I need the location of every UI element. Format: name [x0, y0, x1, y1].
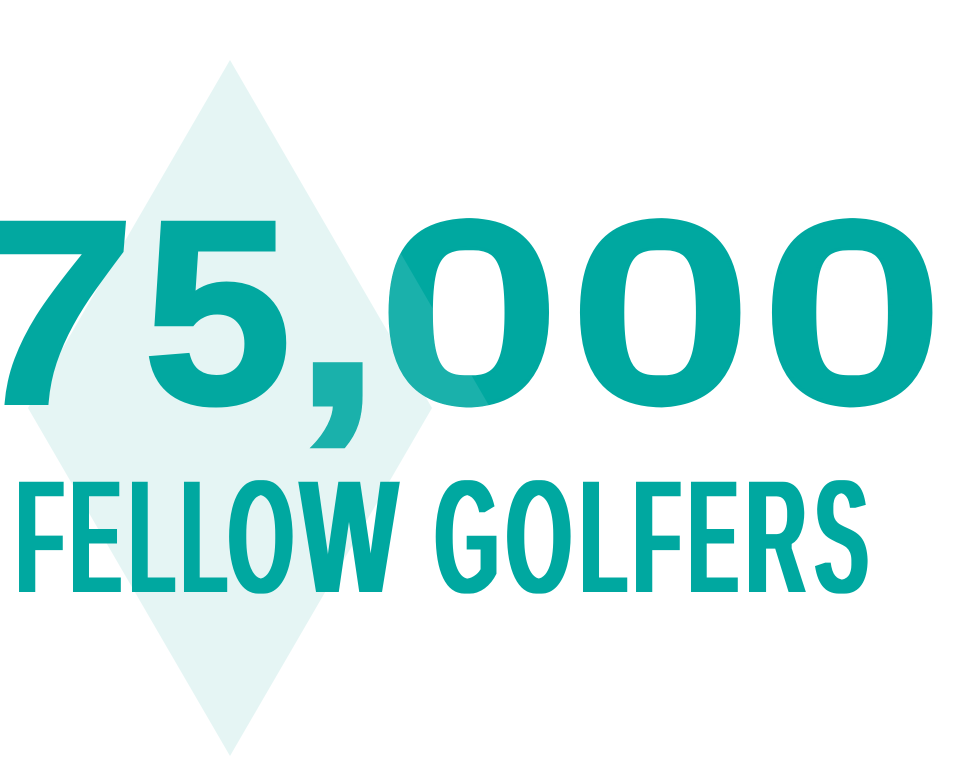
caption: fellow golfers: L	[182, 445, 227, 630]
caption: fellow golfers: L	[130, 445, 175, 630]
number part: comma and zeros: 0	[374, 166, 564, 459]
number part: 75: 5	[143, 166, 292, 459]
number part: comma and zeros	[293, 160, 948, 462]
caption: fellow golfers: O	[506, 445, 572, 630]
caption: fellow golfers: E	[70, 445, 121, 630]
caption: fellow golfers: O	[228, 445, 294, 630]
caption: fellow golfers: G	[435, 445, 499, 630]
number part: comma and zeros: 0	[565, 166, 756, 459]
light overlap on comma and first zero	[300, 209, 502, 455]
caption: fellow golfers: W	[300, 445, 398, 630]
number part: comma and zeros: ,	[293, 160, 382, 462]
number part: 75	[0, 166, 292, 459]
caption: fellow golfers: F	[633, 445, 681, 630]
caption: fellow golfers: L	[580, 445, 627, 630]
number part: comma and zeros: 0	[757, 166, 948, 459]
caption: fellow golfers: F	[16, 445, 64, 630]
caption: fellow golfers: E	[688, 445, 738, 630]
infographic: S	[815, 445, 868, 630]
caption: fellow golfers: R	[746, 445, 806, 630]
diamond shape	[28, 60, 432, 756]
